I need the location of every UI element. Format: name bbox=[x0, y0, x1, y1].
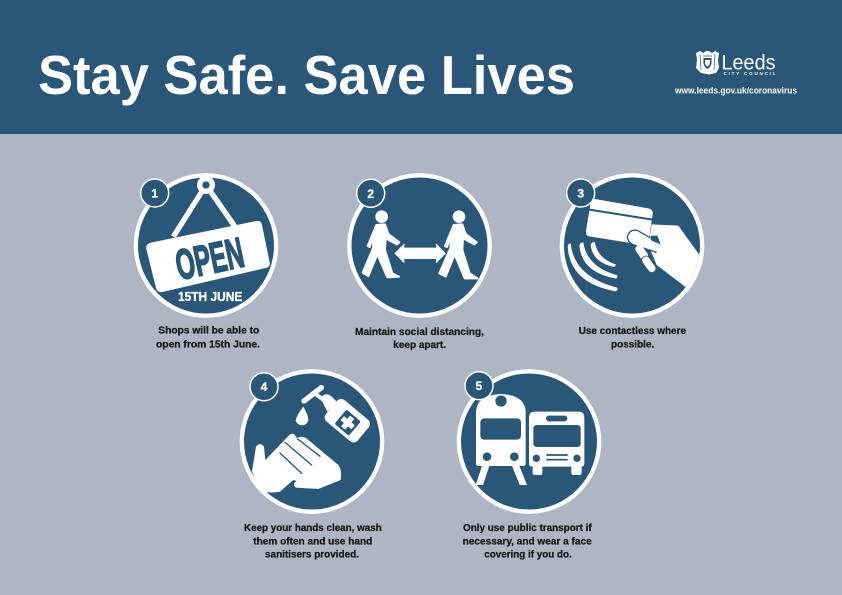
icon: open sign bbox=[134, 173, 278, 318]
caption 4 bbox=[244, 523, 382, 561]
logo: Leeds City Council: CITY COUNCIL bbox=[724, 71, 776, 76]
title: Stay Safe. Save Lives bbox=[38, 45, 575, 106]
icon: two people and arrow bbox=[347, 173, 492, 318]
header banner bbox=[0, 0, 842, 134]
logo: Leeds City Council bbox=[674, 51, 797, 96]
badge: number 2 bbox=[357, 179, 385, 207]
caption 4: sanitisers provided. bbox=[265, 550, 359, 561]
caption 5 bbox=[463, 523, 592, 561]
panel: step 3 contactless bbox=[560, 173, 707, 351]
icon: open sign: 15TH JUNE bbox=[178, 290, 242, 304]
badge: number 3 bbox=[567, 179, 595, 207]
icon: open sign: OPEN bbox=[171, 229, 248, 290]
panel: step 4 hand hygiene bbox=[240, 369, 384, 561]
website address: www.leeds.gov.uk/coronavirus bbox=[674, 86, 797, 96]
caption 3: Use contactless where bbox=[579, 326, 686, 337]
badge: number 5: 5 bbox=[476, 379, 483, 393]
badge: number 3: 3 bbox=[577, 186, 584, 200]
caption 5: necessary, and wear a face bbox=[463, 536, 592, 547]
caption 5: Only use public transport if bbox=[463, 523, 592, 534]
icon: crest bbox=[696, 51, 719, 74]
badge: number 4: 4 bbox=[261, 380, 268, 394]
panel: step 1 open sign bbox=[134, 173, 278, 350]
badge: number 4 bbox=[250, 373, 278, 401]
caption 2: keep apart. bbox=[393, 340, 446, 351]
caption 5: covering if you do. bbox=[484, 550, 572, 561]
caption 1: Shops will be able to bbox=[158, 326, 259, 336]
badge: number 1: 1 bbox=[151, 186, 158, 200]
caption 3: possible. bbox=[611, 340, 655, 351]
caption 1 bbox=[156, 326, 260, 350]
logo: Leeds City Council: Leeds bbox=[722, 52, 776, 74]
badge: number 2: 2 bbox=[367, 187, 374, 201]
caption 2: Maintain social distancing, bbox=[355, 327, 484, 338]
panel: step 2 social distancing bbox=[347, 173, 492, 351]
panel: step 5 public transport bbox=[457, 369, 601, 561]
badge: number 1 bbox=[141, 179, 169, 207]
icon: sanitiser and hands bbox=[240, 369, 384, 514]
caption 4: them often and use hand bbox=[253, 536, 372, 547]
caption 4: Keep your hands clean, wash bbox=[244, 523, 382, 534]
caption 3 bbox=[579, 326, 686, 351]
caption 2 bbox=[355, 327, 484, 351]
caption 1: open from 15th June. bbox=[156, 340, 260, 350]
icon: card and hand bbox=[560, 173, 707, 318]
badge: number 5 bbox=[465, 372, 493, 400]
icon: train and bus bbox=[457, 369, 601, 514]
